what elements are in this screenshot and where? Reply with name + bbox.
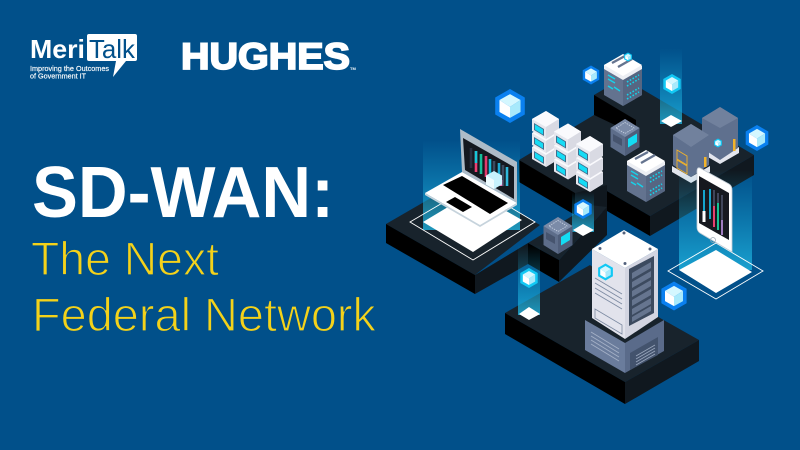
phone chart bars (704, 189, 722, 235)
platform: main server (505, 265, 699, 404)
icon: hexagon top-left small (583, 66, 599, 84)
lower label (595, 309, 622, 334)
icon: hexagon middle (574, 199, 592, 219)
subheading line 2: Federal Network (32, 288, 376, 341)
logo tagline: Improving the Outcomes (30, 66, 110, 73)
isometric network illustration (386, 48, 768, 404)
tower: front (672, 124, 710, 183)
laptop screen (463, 138, 514, 199)
title (31, 153, 376, 341)
tower left (592, 249, 625, 339)
icon: small hexagon on server (624, 52, 632, 62)
icon: server gem (598, 264, 613, 280)
phone body (697, 168, 732, 252)
icon: tower gem (714, 138, 722, 148)
platform: server stacks (519, 115, 640, 215)
tower: back (701, 107, 739, 164)
tile and beam: phone (668, 170, 763, 299)
beam: top (660, 48, 682, 124)
server: cube upper (610, 119, 640, 156)
trademark: TM (350, 66, 356, 71)
laptop base (425, 172, 517, 225)
heading: SD-WAN: SD-WAN: (32, 153, 334, 233)
Hughes wordmark: HUGHES (181, 36, 350, 77)
beam: middle (572, 192, 594, 232)
beam: lower left (518, 245, 540, 315)
logo: Hughes (181, 36, 356, 77)
icon: hexagon top-left large (495, 89, 525, 123)
logo bubble (87, 34, 137, 77)
icon: hexagon right (746, 125, 768, 151)
rack units (632, 262, 651, 322)
logo tagline line 2: of Government IT (30, 74, 87, 80)
base vents (591, 332, 619, 361)
tile and beam: laptop (410, 140, 535, 260)
icon: hexagon lower left (520, 268, 538, 288)
screw holes (598, 232, 652, 265)
logo wordmark: Meri: Meri (30, 34, 85, 64)
laptop bar chart (471, 148, 507, 186)
tile: middle (573, 224, 594, 236)
subheading line 1: The Next (31, 232, 219, 285)
stack: servers 1 (532, 111, 559, 167)
icon: hexagon top (663, 74, 681, 94)
tile: lower left (519, 307, 540, 320)
tower top (592, 230, 658, 268)
main server (585, 230, 664, 373)
icon: laptop gem (486, 171, 502, 189)
server base left (585, 320, 625, 373)
server base right (625, 320, 664, 373)
icon: hexagon lower right (661, 282, 687, 310)
stack: servers 2 (554, 124, 581, 180)
laptop (425, 129, 517, 227)
laptop trackpad (446, 197, 472, 212)
server: dark lower (627, 150, 665, 202)
tower right (625, 249, 658, 339)
platform: top cluster (594, 78, 754, 236)
platform: laptop (386, 180, 540, 294)
server: cube lower (544, 217, 572, 254)
phone home button (710, 238, 716, 242)
logo wordmark: Talk: Talk (89, 34, 136, 64)
tile: top (661, 115, 682, 127)
server: dark upper (604, 54, 642, 106)
base grille (630, 337, 658, 370)
laptop keyboard (443, 176, 508, 214)
platform: small server (528, 205, 607, 282)
logo: MeriTalk (30, 34, 137, 80)
phone (697, 168, 732, 252)
laptop screen frame (460, 129, 517, 203)
rack panel (629, 256, 654, 326)
side lines (595, 278, 622, 309)
stack: servers 3 (576, 136, 603, 192)
phone screen (699, 176, 729, 240)
